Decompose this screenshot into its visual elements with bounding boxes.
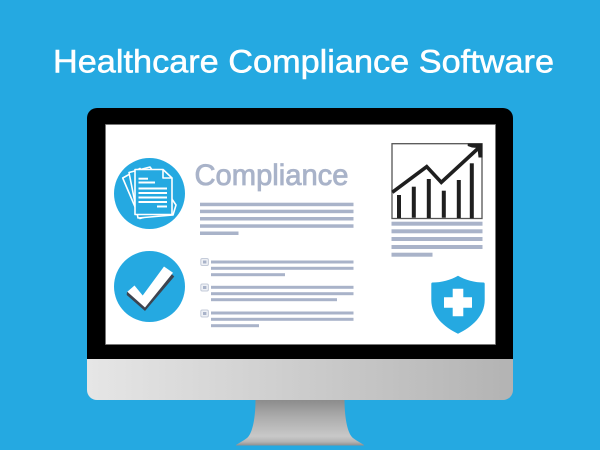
- icon: documents: [114, 158, 185, 229]
- checklist item 3: [201, 310, 354, 327]
- monitor chin: [87, 359, 513, 400]
- checklist item 1: [201, 258, 354, 276]
- icon: medical shield: [431, 276, 485, 334]
- monitor bezel: [87, 108, 513, 359]
- monitor: [87, 108, 513, 446]
- heading: Compliance: Compliance: [194, 159, 348, 192]
- monitor stand: [236, 399, 364, 446]
- checklist item 2: [201, 284, 354, 301]
- text block: intro lines: [200, 203, 354, 235]
- text block: chart caption: [392, 222, 482, 257]
- icon: check mark: [114, 251, 185, 322]
- chart: rising bars and trend line: [392, 144, 482, 218]
- screen: [106, 124, 496, 344]
- title: Healthcare Compliance Software: [53, 44, 554, 80]
